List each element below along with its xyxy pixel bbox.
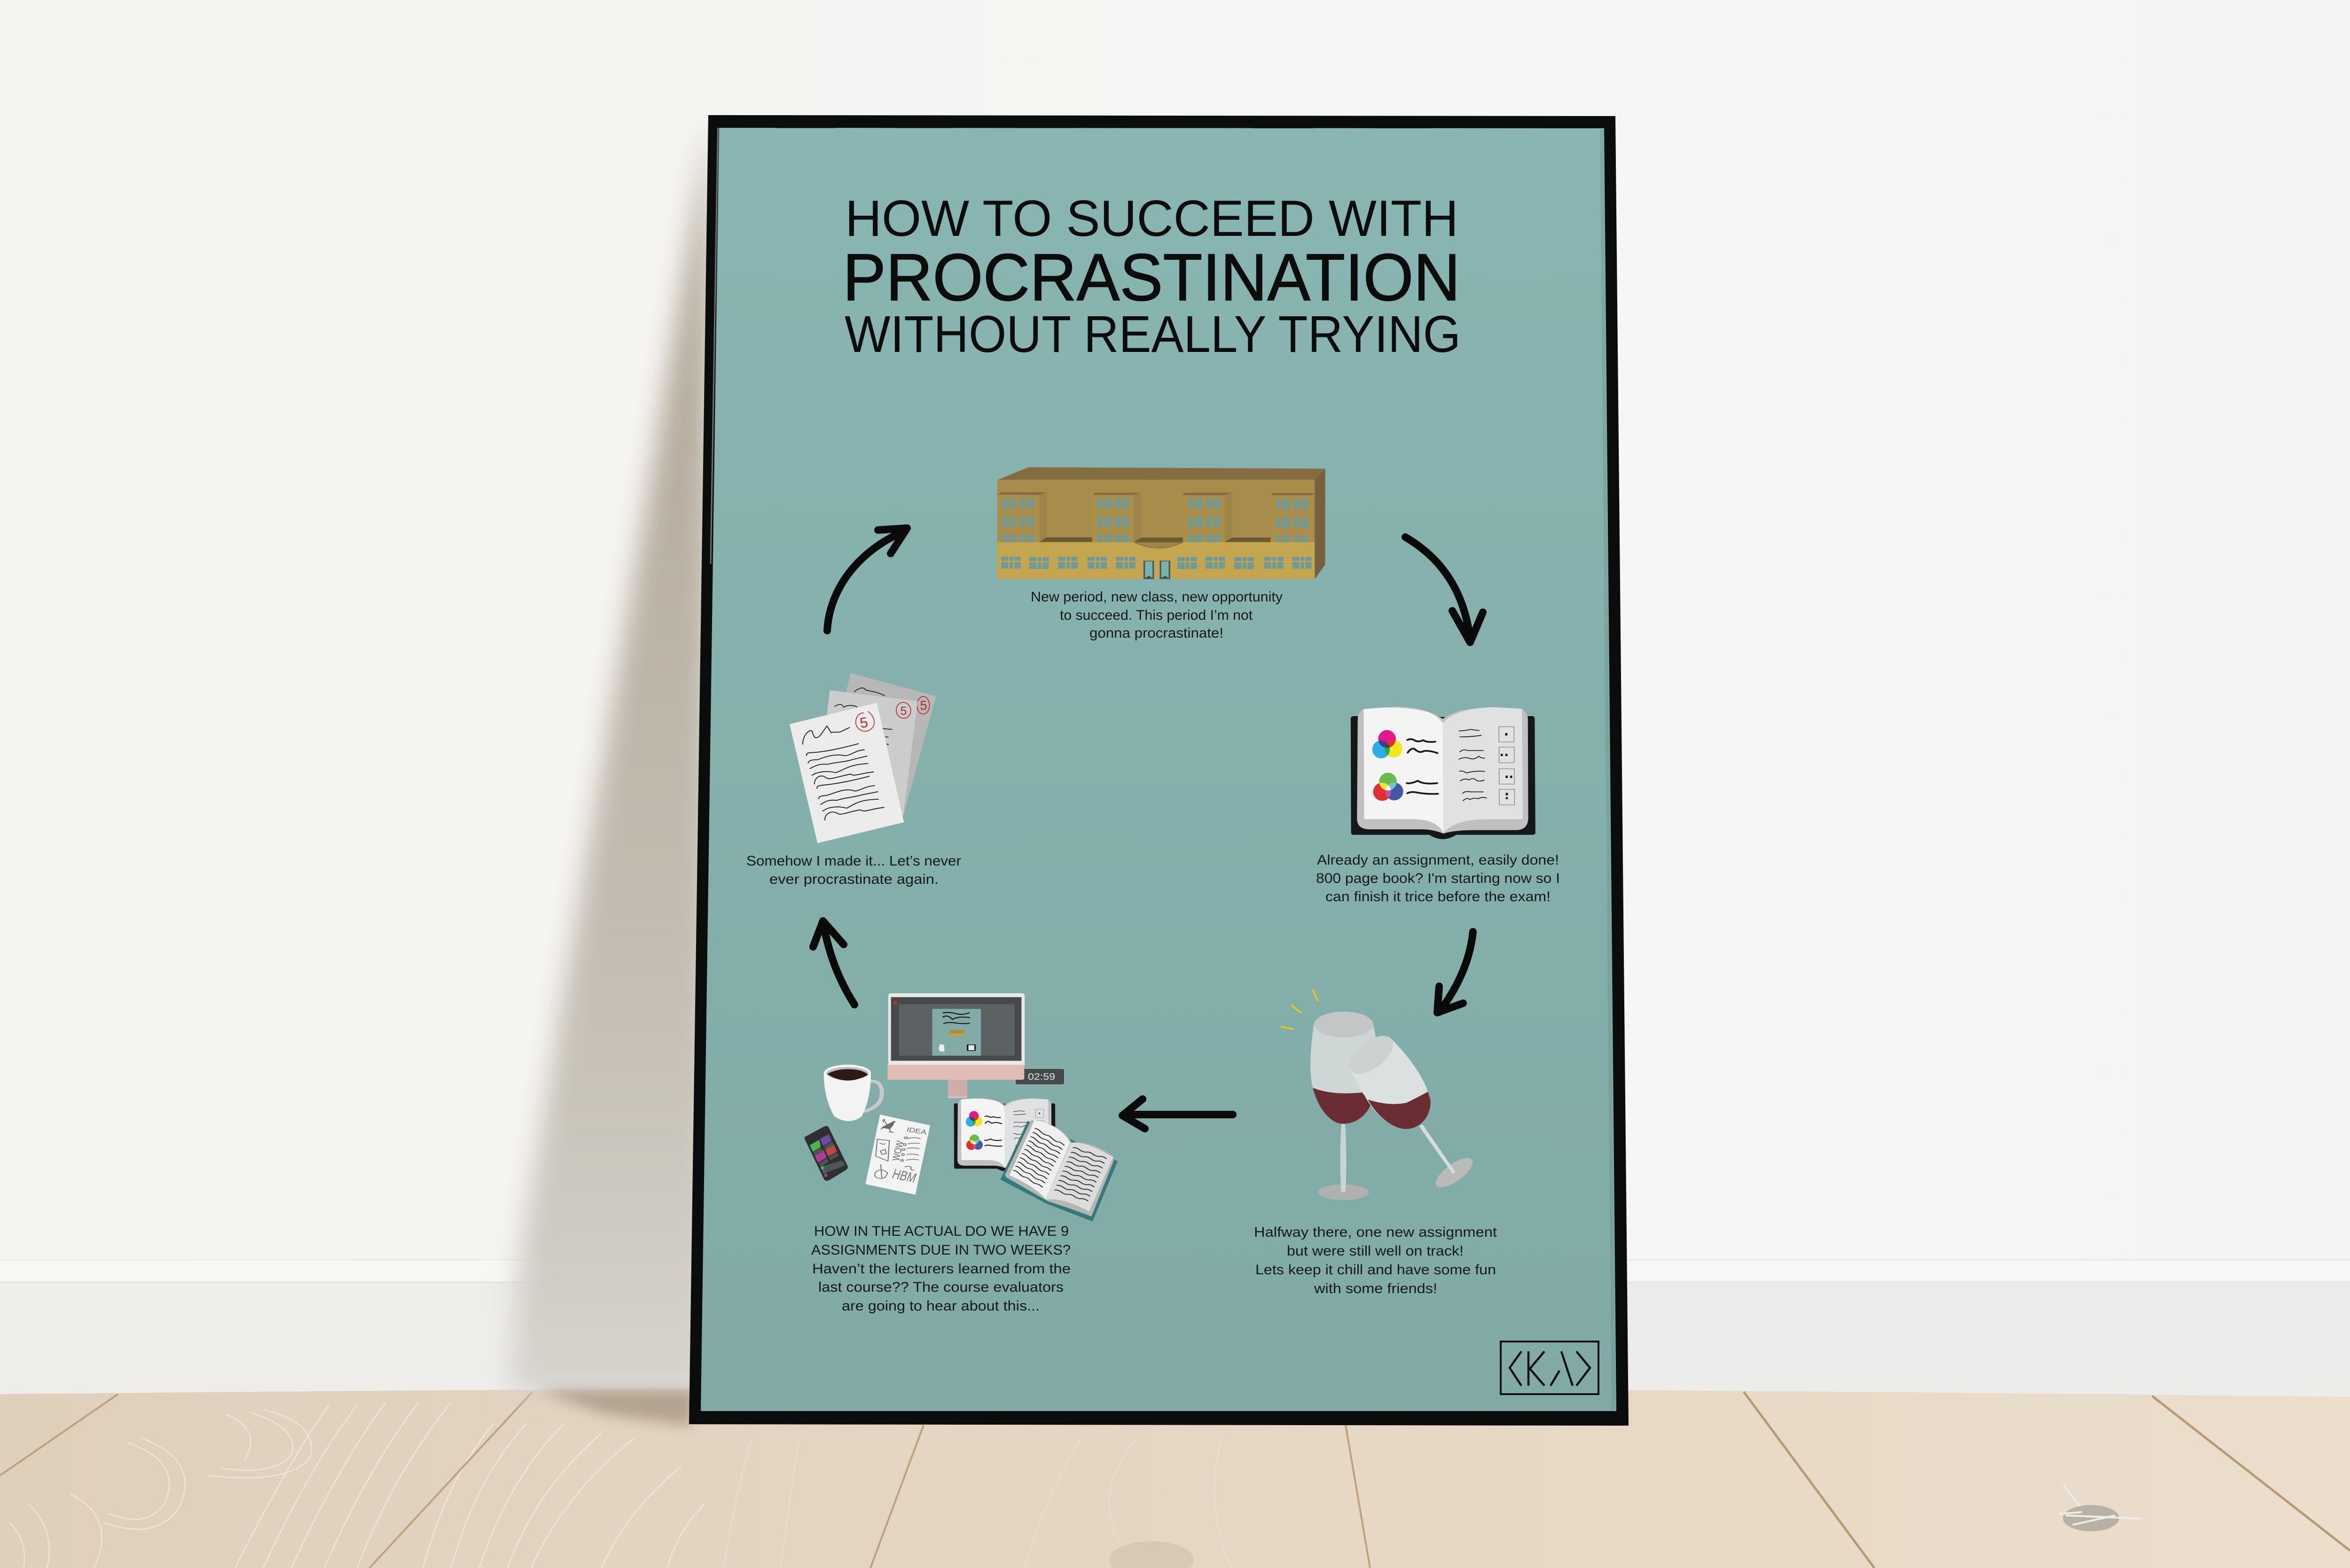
caption: assignment done: can finish it trice before the exam!: [1325, 889, 1551, 905]
poster shadow on floor: [536, 1390, 696, 1426]
frame: [689, 115, 1629, 1426]
arrow: wine to desk: [1122, 1099, 1233, 1129]
logo: KA monogram: [1501, 1342, 1598, 1394]
title: WITHOUT REALLY TRYING: [845, 305, 1461, 363]
caption: halfway there: Lets keep it chill and have some fun: [1255, 1262, 1496, 1278]
caption: halfway there: with some friends!: [1314, 1281, 1437, 1296]
background: wooden floor: [0, 1388, 2350, 1568]
icon: sketch paper: [865, 1115, 930, 1194]
title: PROCRASTINATION: [843, 240, 1460, 315]
icon: smartphone: [805, 1126, 848, 1181]
arrow: papers back to building: [827, 528, 907, 631]
icon: sketch paper: HBM: [890, 1167, 919, 1186]
title: HOW TO SUCCEED WITH: [845, 190, 1458, 247]
icon: open notebook on desk: [1000, 1120, 1118, 1222]
icon: graded papers: 5: [920, 698, 927, 713]
caption: halfway there: but were still well on track!: [1287, 1243, 1464, 1259]
caption: nine assignments: are going to hear about this...: [842, 1298, 1040, 1314]
icon: school building: [997, 467, 1325, 579]
icon: sketch paper: IDEA: [906, 1126, 928, 1136]
caption: nine assignments: HOW IN THE ACTUAL DO WE HAVE 9: [814, 1224, 1069, 1239]
icon: graded papers: 5: [900, 704, 907, 718]
arrow: building to book: [1405, 537, 1483, 642]
illustration: cluttered desk: [805, 993, 1118, 1222]
icon: open textbook: [1351, 706, 1535, 839]
caption: new period: to succeed. This period I’m not: [1060, 608, 1253, 623]
icon: sketch paper: WOW: [890, 1140, 906, 1162]
caption: assignment done: Already an assignment, easily done!: [1317, 852, 1559, 868]
title: [843, 190, 1461, 363]
caption: somehow made it: [746, 853, 961, 887]
icon: coffee mug: [824, 1065, 882, 1121]
poster in black frame: [689, 115, 1629, 1426]
icon: graded papers: 5: [859, 714, 869, 731]
poster shadow on wall: [510, 123, 710, 1392]
icon: graded papers: [790, 673, 936, 843]
background: skirting board: [0, 1259, 2350, 1397]
caption: somehow made it: Somehow I made it... Let’s never: [746, 853, 961, 869]
caption: halfway there: [1254, 1225, 1497, 1296]
arrow: book to wine: [1437, 932, 1473, 1013]
poster background: [701, 128, 1616, 1411]
arrow: desk to graded papers: [813, 921, 854, 1005]
icon: clinking wine glasses: [1281, 989, 1477, 1200]
caption: new period: New period, new class, new opportunity: [1031, 589, 1283, 605]
caption: nine assignments: [811, 1224, 1071, 1314]
caption: new period: [1031, 589, 1283, 641]
caption: halfway there: Halfway there, one new assignment: [1254, 1225, 1497, 1240]
caption: nine assignments: ASSIGNMENTS DUE IN TWO WEEKS?: [811, 1242, 1071, 1258]
caption: assignment done: [1316, 852, 1560, 905]
caption: nine assignments: Haven’t the lecturers learned from the: [812, 1261, 1071, 1277]
caption: somehow made it: ever procrastinate again.: [769, 872, 939, 887]
icon: computer with countdown: 02:59: [1028, 1072, 1055, 1082]
caption: nine assignments: last course?? The course evaluators: [818, 1279, 1064, 1295]
caption: assignment done: 800 page book? I'm starting now so I: [1316, 871, 1560, 886]
icon: computer with countdown: Ai: [893, 1000, 897, 1006]
icon: textbook on desk: [954, 1098, 1056, 1171]
icon: computer with countdown: [887, 993, 1065, 1098]
caption: new period: gonna procrastinate!: [1089, 625, 1223, 641]
